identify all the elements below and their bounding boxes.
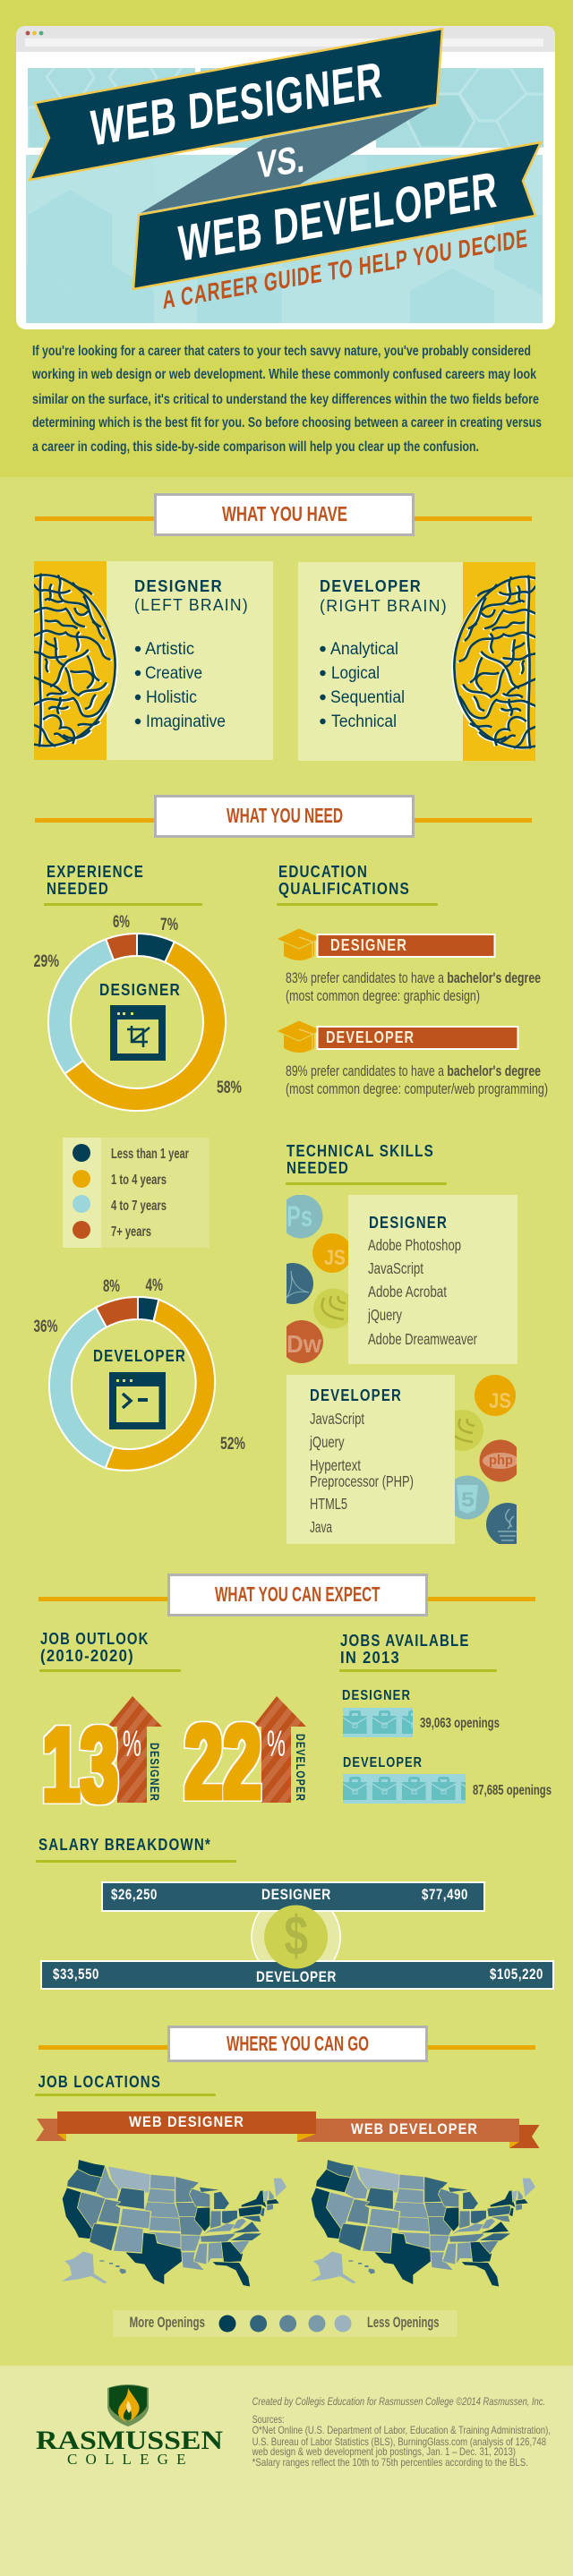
education: developer: 89% prefer candidates to have a bachelor's degree [286, 1062, 541, 1079]
education: designer: (most common degree: graphic design) [286, 987, 480, 1004]
bar: developer salary [41, 1961, 553, 1989]
heading: experience needed: EXPERIENCE [47, 863, 144, 881]
heading: job outlook [39, 1630, 181, 1672]
credits and sources: Sources: [252, 2413, 285, 2426]
icons: developer technologies [455, 1375, 517, 1544]
chart: designer outlook 13%: % [123, 1723, 141, 1764]
legend: experience: 7+ years [111, 1224, 151, 1240]
chart: developer outlook 22%: DEVELOPER [294, 1734, 307, 1802]
heading: jobs available: IN 2013 [340, 1649, 400, 1667]
panel: developer skills: Java [310, 1518, 332, 1536]
panel: developer right brain: (RIGHT BRAIN) [320, 597, 448, 615]
icons: designer software: Ps [286, 1200, 312, 1233]
panel: designer left brain [34, 561, 273, 760]
logo: Rasmussen College [36, 2384, 223, 2468]
list: designer traits: Imaginative [146, 712, 226, 731]
panel: developer skills: HTML5 [310, 1495, 347, 1513]
ribbon: web developer: WEB DEVELOPER [351, 2120, 478, 2137]
title ribbon: web designer: WEB DESIGNER [90, 51, 384, 157]
panel: developer skills: Hypertext [310, 1456, 361, 1474]
section banner: where you can go [38, 2026, 535, 2060]
bar: developer salary: DEVELOPER [256, 1969, 337, 1985]
icons: developer technologies: 5 [461, 1488, 475, 1511]
panel: designer left brain: (LEFT BRAIN) [134, 596, 249, 614]
bar: designer salary: $77,490 [422, 1887, 468, 1903]
bar: developer salary: $105,220 [490, 1966, 543, 1983]
legend: experience [63, 1138, 210, 1248]
icon: dollar coin: $ [285, 1906, 308, 1967]
heading: jobs available [339, 1632, 497, 1672]
section banner: what you can expect: WHAT YOU CAN EXPECT [215, 1582, 380, 1606]
jobs: developer openings: DEVELOPER [343, 1755, 423, 1770]
heading: job locations: JOB LOCATIONS [38, 2073, 161, 2091]
logo: Rasmussen College: COLLEGE [67, 2451, 193, 2468]
chart: designer outlook 13%: 13 [42, 1706, 118, 1824]
icon: graduation cap [277, 1020, 321, 1053]
donut chart: designer experience: 29% [34, 952, 59, 971]
icon: crop window [110, 1005, 166, 1061]
jobs: designer openings: DESIGNER [342, 1688, 411, 1703]
heading: salary breakdown: SALARY BREAKDOWN* [38, 1836, 211, 1854]
title: vs. band: VS. [257, 137, 304, 186]
heading: education qualifications [277, 863, 438, 906]
legend: experience: 4 to 7 years [111, 1198, 167, 1214]
ribbon: web designer [36, 2111, 316, 2141]
section banner: what you have [35, 494, 532, 535]
legend: openings scale [113, 2310, 458, 2337]
heading: technical skills needed [286, 1142, 447, 1185]
browser window hero [16, 26, 564, 329]
panel: designer skills: Adobe Dreamweaver [368, 1330, 477, 1348]
donut chart: developer experience: DEVELOPER [93, 1347, 186, 1365]
salary chart [41, 1882, 553, 1989]
list: developer traits: Logical [331, 664, 380, 683]
map: web designer openings [60, 2160, 286, 2287]
chart: designer outlook 13%: DESIGNER [148, 1743, 161, 1802]
icons: briefcases [343, 1777, 466, 1800]
donut chart: developer experience [34, 1276, 245, 1471]
panel: designer left brain: DESIGNER [134, 577, 223, 595]
ribbon: web developer [297, 2119, 539, 2148]
education: designer [277, 928, 541, 1004]
panel: designer skills: DESIGNER [369, 1214, 448, 1232]
donut chart: designer experience: 7% [160, 916, 178, 934]
panel: developer skills: Preprocessor (PHP) [310, 1472, 414, 1490]
map: web developer openings [309, 2160, 535, 2287]
panel: designer skills: Adobe Acrobat [368, 1283, 447, 1301]
bar: designer salary: $26,250 [111, 1887, 158, 1903]
donut chart: developer experience: 8% [103, 1277, 120, 1296]
ribbon: web designer: WEB DESIGNER [129, 2113, 244, 2130]
heading: technical skills needed: NEEDED [286, 1159, 349, 1177]
donut chart: designer experience [34, 913, 242, 1111]
heading: education qualifications: QUALIFICATIONS [278, 880, 410, 898]
jobs: designer openings [342, 1688, 500, 1737]
legend: openings scale: More Openings [129, 2314, 205, 2331]
panel: developer skills [286, 1375, 529, 1546]
icons: briefcases [343, 1710, 413, 1734]
panel: designer skills: JavaScript [368, 1259, 423, 1277]
icons: developer technologies: JS [489, 1389, 511, 1413]
panel: designer skills: Adobe Photoshop [368, 1236, 461, 1254]
heading: experience needed: NEEDED [47, 880, 109, 898]
icons: developer technologies: php [489, 1453, 513, 1468]
bar: designer salary: DESIGNER [261, 1887, 331, 1903]
heading: education qualifications: EDUCATION [278, 863, 368, 881]
heading: technical skills needed: TECHNICAL SKILLS [286, 1142, 434, 1160]
donut chart: developer experience: 36% [34, 1318, 58, 1336]
credits and sources [252, 2395, 551, 2469]
list: designer traits: Artistic [145, 640, 194, 659]
donut chart: developer experience: 4% [145, 1276, 163, 1295]
bar: designer salary [102, 1882, 484, 1911]
legend: openings scale: Less Openings [367, 2314, 439, 2331]
logo: Rasmussen College: RASMUSSEN [36, 2426, 223, 2455]
credits and sources: web design & web development job postings, Jan. 1 – Dec. 31, 2013) [252, 2445, 516, 2458]
heading: jobs available: JOBS AVAILABLE [340, 1632, 469, 1650]
section banner: what you have: WHAT YOU HAVE [222, 502, 347, 525]
bar: developer salary: $33,550 [53, 1966, 99, 1983]
donut chart: designer experience: 6% [113, 913, 130, 932]
intro paragraph [31, 344, 542, 455]
list: designer traits: Holistic [146, 688, 197, 707]
panel: developer skills: jQuery [309, 1433, 345, 1451]
panel: designer skills: jQuery [367, 1306, 402, 1324]
icon: graduation cap [277, 928, 321, 960]
section banner: what you need: WHAT YOU NEED [227, 804, 343, 827]
icons: designer software: Dw [286, 1330, 321, 1358]
icons: designer software [286, 1195, 348, 1363]
panel: developer right brain [298, 562, 535, 761]
list: developer traits: Technical [331, 712, 397, 731]
education: developer [277, 1020, 548, 1097]
section banner: where you can go: WHERE YOU CAN GO [227, 2032, 369, 2055]
chart: developer outlook 22%: % [267, 1723, 286, 1764]
donut chart: designer experience: DESIGNER [99, 981, 181, 999]
legend: experience: Less than 1 year [111, 1147, 189, 1162]
jobs: designer openings: 39,063 openings [420, 1716, 500, 1731]
education: developer: DEVELOPER [326, 1028, 415, 1046]
donut chart: developer experience: 52% [220, 1435, 245, 1454]
panel: developer skills: JavaScript [310, 1410, 364, 1428]
jobs: developer openings [343, 1755, 552, 1804]
icon: terminal window [109, 1372, 166, 1429]
heading: job outlook: (2010-2020) [40, 1647, 134, 1665]
heading: experience needed [44, 863, 202, 906]
panel: developer right brain: DEVELOPER [320, 577, 422, 595]
title: vs. band [141, 107, 430, 213]
icon: left brain [34, 573, 118, 748]
icon: dollar coin [264, 1905, 328, 1969]
list: developer traits: Analytical [330, 640, 398, 659]
chart: developer outlook 22%: 22 [184, 1703, 261, 1821]
list: developer traits [320, 640, 405, 731]
section banner: what you need [35, 797, 532, 836]
title ribbon: web designer [30, 29, 442, 180]
section banner: what you can expect [38, 1575, 535, 1615]
donut chart: designer experience: 58% [217, 1079, 242, 1097]
heading: job locations [35, 2073, 216, 2096]
panel: designer skills [272, 1194, 517, 1364]
heading: job outlook: JOB OUTLOOK [40, 1630, 149, 1648]
icon: right brain [451, 575, 535, 750]
panel: developer skills: DEVELOPER [310, 1386, 402, 1404]
list: designer traits: Creative [145, 664, 202, 683]
list: designer traits [135, 640, 226, 731]
heading: salary breakdown [36, 1836, 236, 1863]
list: developer traits: Sequential [330, 688, 405, 707]
icons: designer software: JS [324, 1246, 346, 1270]
education: designer: 83% prefer candidates to have a bachelor's degree [286, 969, 541, 986]
legend: experience: 1 to 4 years [111, 1173, 167, 1188]
education: designer: DESIGNER [330, 936, 407, 954]
